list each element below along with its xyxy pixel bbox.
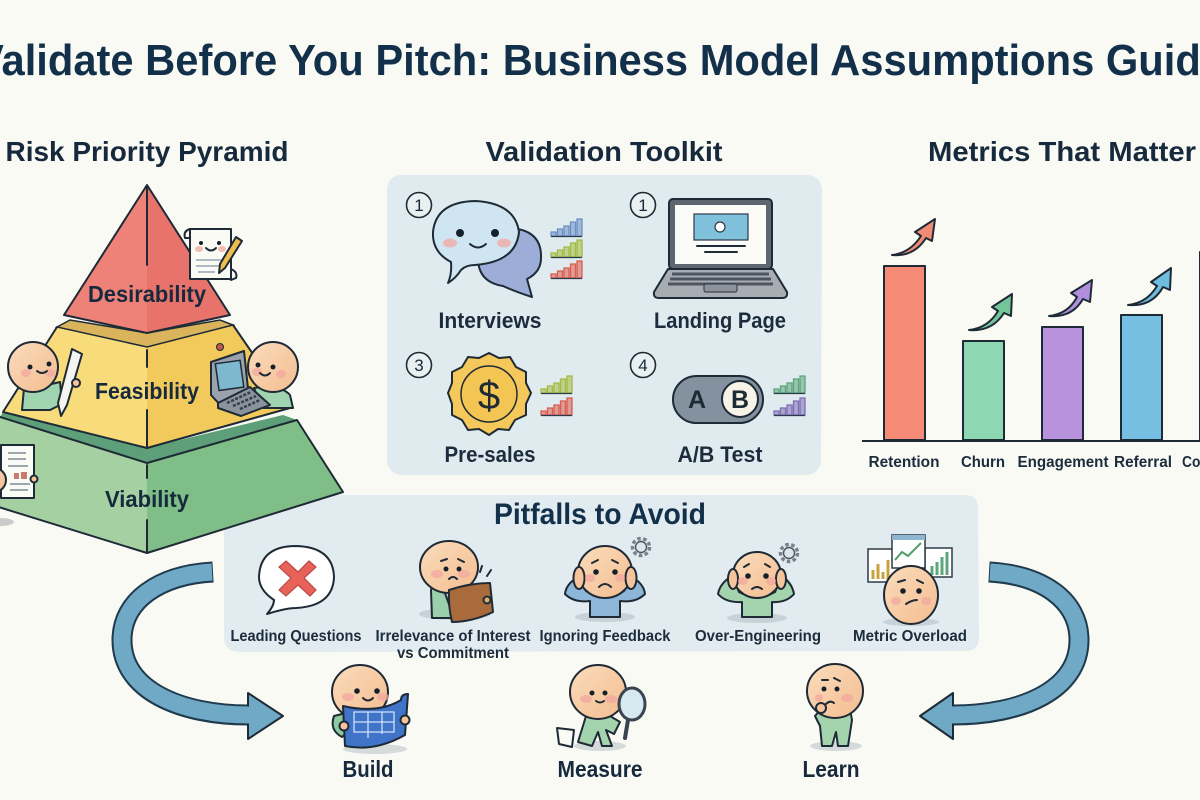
figure: head in hands green xyxy=(718,552,794,623)
arrow: churn xyxy=(969,294,1012,330)
labels: Referral xyxy=(1114,454,1172,471)
tier: feasibility xyxy=(3,320,290,448)
number badge 4: 4 xyxy=(638,356,648,375)
tier: viability: Viability xyxy=(105,486,189,512)
label: A/B Test xyxy=(678,442,763,467)
number badge 3 xyxy=(406,352,432,378)
tier: viability xyxy=(0,412,343,553)
number badge 1 xyxy=(630,192,656,218)
figure: person with machine xyxy=(211,342,298,416)
label: vs Commitment xyxy=(397,645,510,662)
arrow: right loop xyxy=(920,572,1079,739)
label: Pre-sales xyxy=(444,442,536,467)
heading: validation toolkit: Validation Toolkit xyxy=(486,136,722,167)
icon: gear xyxy=(632,538,650,556)
bar: retention xyxy=(884,266,925,440)
icon: coin xyxy=(448,353,531,435)
bar: engagement xyxy=(1042,327,1083,440)
bar: referral xyxy=(1121,315,1162,440)
icon: speech bubble with x xyxy=(259,546,334,614)
icon: coin: $ xyxy=(478,374,500,418)
panel: validation toolkit xyxy=(387,175,822,475)
labels: Retention xyxy=(868,454,940,471)
signal bars: pre-sales xyxy=(541,376,572,416)
tier: desirability: Desirability xyxy=(88,281,206,307)
number badge 3: 3 xyxy=(414,356,424,375)
label: Leading Questions xyxy=(230,628,362,645)
figure: person with report xyxy=(0,445,38,526)
icon: chat bubbles xyxy=(433,201,541,297)
labels: Engagement xyxy=(1018,454,1109,471)
label: Landing Page xyxy=(654,308,786,333)
labels xyxy=(868,454,1200,471)
figure: wallet xyxy=(419,541,493,622)
figure: build xyxy=(332,665,410,754)
icon: gear xyxy=(780,544,798,562)
icon: A/B toggle: A xyxy=(688,386,706,414)
arrow: retention xyxy=(892,219,935,255)
heading: Pitfalls to Avoid xyxy=(494,498,706,531)
label: build: Build xyxy=(342,756,394,782)
label: Interviews xyxy=(438,308,542,333)
tier: desirability xyxy=(64,185,230,333)
number badge 1: 1 xyxy=(414,196,424,215)
number badge 4 xyxy=(630,352,656,378)
signal bars: interviews xyxy=(551,219,582,278)
heading: risk priority pyramid: Risk Priority Pyramid xyxy=(6,136,288,167)
icon: smiling document with pencil xyxy=(185,229,242,280)
icon: A/B toggle xyxy=(673,376,763,423)
metrics bar chart xyxy=(862,219,1200,471)
heading: metrics that matter: Metrics That Matter xyxy=(928,136,1196,167)
figure: person with pen xyxy=(8,342,82,416)
signal bars: a/b test xyxy=(774,376,805,416)
figure: learn xyxy=(807,664,863,751)
bar: churn xyxy=(963,341,1004,440)
figure: head in hands blue xyxy=(565,546,645,622)
figure: measure xyxy=(557,665,645,751)
label: Irrelevance of Interest xyxy=(376,628,531,645)
label: Ignoring Feedback xyxy=(540,628,671,645)
pyramid xyxy=(0,185,343,553)
panel: pitfalls to avoid xyxy=(224,495,979,662)
arrow: engagement xyxy=(1049,280,1092,316)
number badge 1 xyxy=(406,192,432,218)
label: measure: Measure xyxy=(558,756,642,782)
label: Over-Engineering xyxy=(695,628,821,645)
label: Metric Overload xyxy=(853,628,967,645)
arrow: left loop xyxy=(122,572,283,739)
icon: A/B toggle: B xyxy=(731,386,749,414)
figure: metric overload xyxy=(868,535,952,626)
tier: feasibility: Feasibility xyxy=(95,378,199,404)
labels: Churn xyxy=(961,454,1005,471)
axis xyxy=(862,440,1200,442)
icon: laptop xyxy=(654,199,787,298)
label: learn: Learn xyxy=(802,756,860,782)
number badge 1: 1 xyxy=(638,196,648,215)
arrow: referral xyxy=(1128,268,1171,305)
